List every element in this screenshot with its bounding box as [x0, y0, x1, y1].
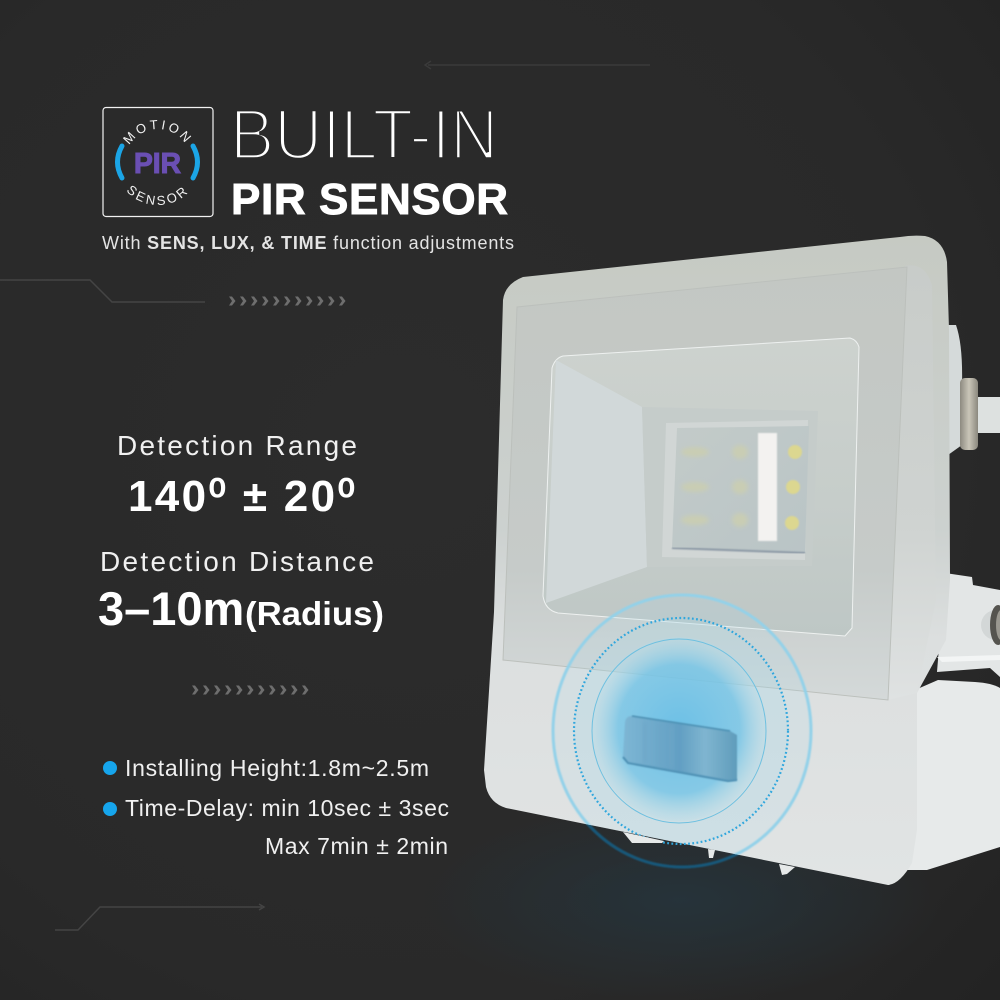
max delay text: Max 7min ± 2min — [265, 833, 448, 859]
detection range value: 140⁰ ± 20⁰ — [128, 472, 355, 521]
decorative circuit line: top — [425, 61, 650, 69]
time delay text: Time-Delay: min 10sec ± 3sec — [125, 795, 449, 821]
detection distance value — [98, 582, 384, 635]
title: PIR SENSOR: PIR SENSOR — [231, 175, 508, 224]
decorative circuit line: left — [0, 280, 205, 302]
detection distance value: (Radius) — [245, 595, 384, 632]
LED panel — [672, 426, 809, 553]
detection distance value: 3–10m — [98, 582, 244, 635]
reflected highlight bar — [758, 433, 777, 541]
reflector inner opening — [642, 407, 818, 567]
bullet dot: installing height — [103, 761, 117, 775]
decorative circuit line: bottom — [55, 904, 264, 930]
blue ring behind housing — [553, 595, 811, 867]
subtitle: With SENS, LUX, & TIME function adjustments — [102, 233, 514, 253]
bottom tabs — [623, 832, 795, 875]
lit LEDs — [785, 445, 802, 530]
PIR sensor lens — [623, 716, 737, 781]
housing highlight on top edge — [600, 298, 648, 301]
detection distance label: Detection Distance — [100, 546, 374, 577]
housing textured right strip — [888, 265, 936, 700]
housing front frame — [503, 267, 907, 700]
glass window — [543, 338, 859, 636]
bullet list: installing height and time delay — [103, 755, 449, 859]
cable and nut at upper right — [948, 325, 1000, 455]
chevron row: upper — [229, 296, 346, 306]
LED module housing — [662, 420, 808, 560]
title: BUILT-IN: BUILT-IN — [230, 96, 498, 175]
icon: PIR motion sensor badge: SENSOR — [127, 186, 188, 205]
icon: PIR motion sensor badge: PIR — [134, 148, 181, 180]
icon: PIR motion sensor badge: MOTION — [123, 120, 192, 144]
detection range label: Detection Range — [117, 430, 357, 461]
bullet dot: time delay — [103, 802, 117, 816]
sensor glow and detection rings — [553, 595, 811, 867]
rear box — [905, 680, 1000, 870]
installing height text: Installing Height:1.8m~2.5m — [125, 755, 429, 781]
reflector left facet — [546, 360, 647, 603]
icon: PIR motion sensor badge — [102, 106, 214, 218]
housing outer body — [484, 236, 950, 885]
floodlight product illustration — [484, 236, 1000, 885]
muted LEDs — [681, 445, 748, 527]
chevron row: lower — [192, 686, 308, 694]
mounting bracket — [937, 573, 1000, 677]
